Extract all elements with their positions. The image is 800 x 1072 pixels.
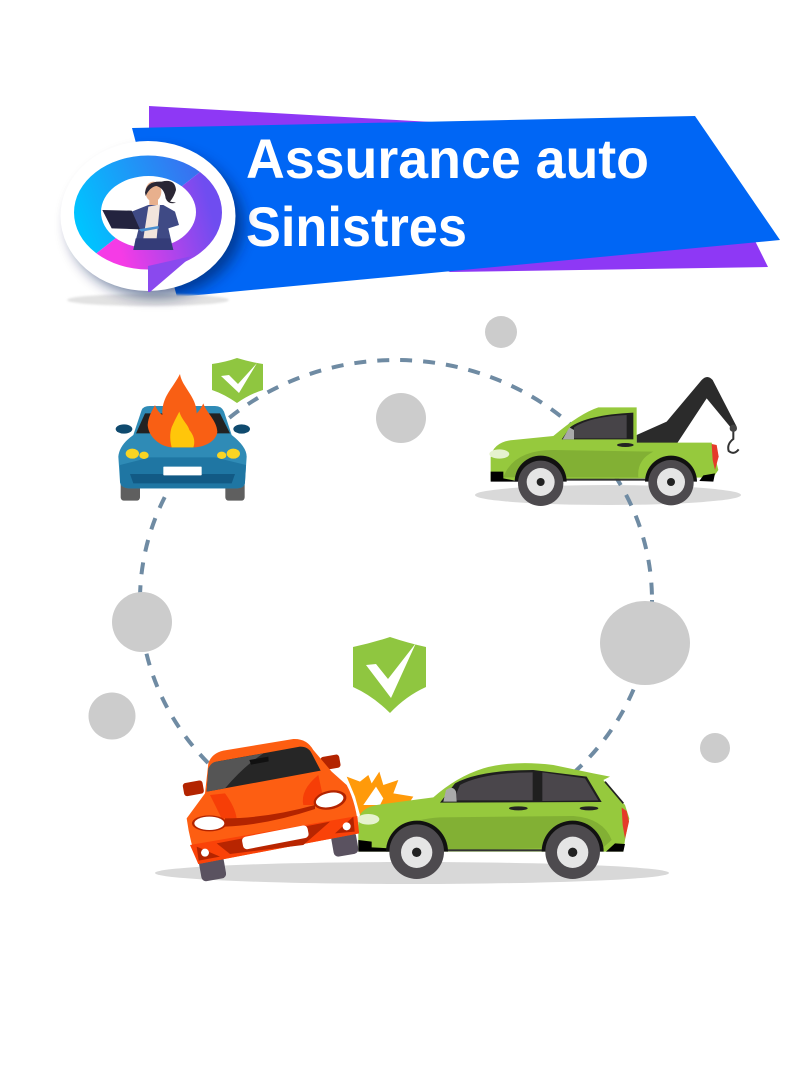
header banner xyxy=(132,106,780,297)
icon: car on fire xyxy=(116,374,250,501)
icon: green tow truck xyxy=(489,377,739,506)
icon: agent with laptop xyxy=(102,181,179,250)
icon: explosion and green car xyxy=(347,763,629,879)
banner: purple back ribbon xyxy=(149,106,768,272)
title: Assurance auto xyxy=(246,127,649,190)
logo: speech bubble with agent xyxy=(60,141,243,306)
title xyxy=(246,127,649,258)
icon: small green shield check xyxy=(212,358,263,403)
title: Sinistres xyxy=(246,195,467,258)
shadow: tow truck ground xyxy=(475,485,741,505)
flame xyxy=(148,374,217,447)
icon: orange crashed car xyxy=(182,739,359,882)
icon: large green shield check xyxy=(353,637,426,713)
grey bubbles xyxy=(88,316,730,763)
dashed cycle path xyxy=(140,360,652,840)
infographic canvas xyxy=(59,106,780,884)
shadow: collision ground xyxy=(155,862,669,884)
banner: blue front ribbon xyxy=(132,116,780,297)
